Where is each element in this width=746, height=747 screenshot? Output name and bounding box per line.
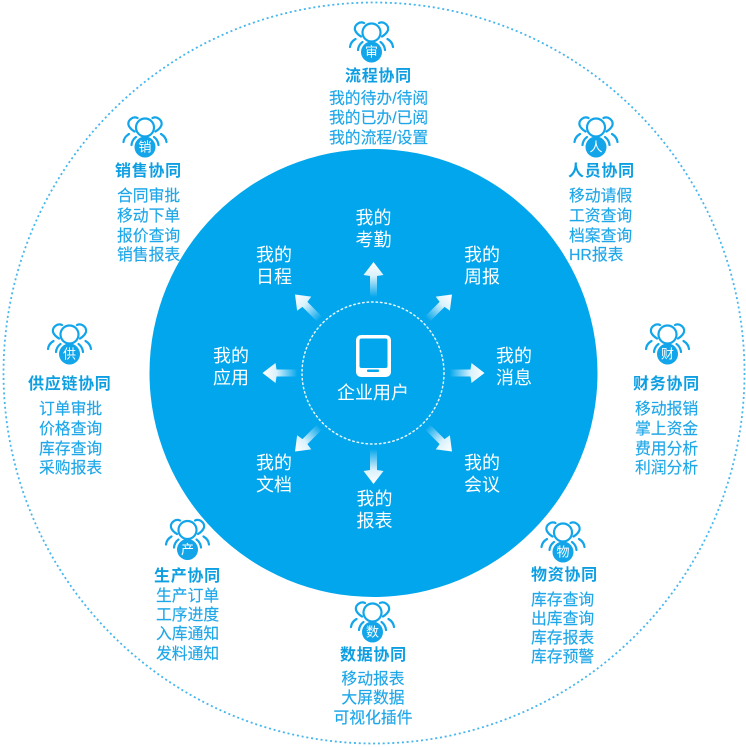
panel: workflow collaboration	[329, 22, 428, 147]
list: 库存查询	[531, 591, 594, 609]
icon: sales: 销	[138, 140, 152, 154]
panel: materials collaboration	[531, 522, 598, 666]
icon: sales	[124, 117, 166, 158]
panel: finance collaboration	[633, 324, 700, 477]
center label: documents: 文档	[256, 475, 292, 495]
arrow: right	[450, 363, 484, 383]
list: 我的待办/待阅	[329, 90, 428, 108]
list: 采购报表	[39, 459, 102, 477]
list: 我的流程/设置	[329, 129, 428, 147]
panel: production collaboration	[154, 520, 221, 663]
icon: finance	[646, 324, 689, 364]
heading: 流程协同	[345, 66, 412, 85]
heading: 财务协同	[633, 374, 700, 393]
list: 移动下单	[117, 207, 180, 225]
panel: sales collaboration	[115, 117, 182, 264]
icon: HR	[574, 117, 618, 158]
list: HR报表	[569, 246, 624, 264]
list: 入库通知	[156, 625, 219, 643]
arrow: down right	[420, 420, 459, 459]
arrow: up left	[288, 287, 327, 326]
center label: schedule: 我的	[256, 245, 292, 265]
panel: data collaboration	[334, 602, 413, 727]
center label: weekly report: 我的	[464, 245, 500, 265]
list: 报价查询	[117, 227, 180, 245]
list: 合同审批	[117, 187, 180, 205]
list: 移动报表	[341, 670, 405, 688]
center label: messages: 我的	[496, 346, 532, 366]
icon: tablet	[356, 335, 391, 377]
list: 订单审批	[39, 400, 102, 418]
list: 可视化插件	[334, 709, 413, 727]
icon: production: 产	[181, 542, 194, 557]
center label: reports: 我的	[356, 489, 392, 509]
panel: HR collaboration	[568, 117, 635, 264]
list: 掌上资金	[635, 420, 698, 438]
center label: meetings: 会议	[464, 475, 500, 495]
icon: materials	[542, 522, 584, 562]
center label: applications: 应用	[213, 368, 249, 388]
arrow: left	[262, 363, 298, 383]
heading: 销售协同	[115, 161, 182, 180]
icon: HR: 人	[589, 140, 603, 154]
icon: data: 数	[366, 624, 379, 640]
list: 移动请假	[569, 187, 632, 205]
center label: meetings: 我的	[464, 453, 500, 473]
icon: supply chain	[48, 324, 91, 364]
list: 价格查询	[39, 420, 102, 438]
center label: weekly report: 周报	[464, 267, 500, 287]
list: 库存预警	[531, 648, 594, 666]
icon: materials: 物	[556, 544, 570, 560]
list: 生产订单	[156, 587, 219, 605]
list: 发料通知	[156, 645, 219, 663]
panel: supply chain collaboration	[28, 324, 112, 477]
list: 出库查询	[531, 610, 594, 628]
arrow: up right	[420, 287, 459, 326]
list: 我的已办/已阅	[329, 109, 428, 127]
center label: attendance: 我的	[356, 208, 392, 228]
list: 利润分析	[635, 459, 698, 477]
list: 库存查询	[39, 440, 102, 458]
center label: applications: 我的	[213, 346, 249, 366]
center label: reports: 报表	[356, 511, 392, 531]
heading: 数据协同	[340, 646, 407, 664]
heading: 物资协同	[531, 566, 598, 584]
list: 费用分析	[635, 440, 698, 458]
center label: attendance: 考勤	[356, 230, 392, 250]
heading: 供应链协同	[28, 374, 112, 393]
center label: messages: 消息	[496, 368, 532, 388]
heading: 人员协同	[568, 162, 635, 180]
list: 销售报表	[117, 246, 180, 264]
icon: finance: 财	[661, 346, 674, 362]
label: enterprise user: 企业用户	[337, 383, 409, 403]
list: 移动报销	[635, 400, 698, 418]
list: 档案查询	[569, 227, 632, 245]
arrow: down	[364, 449, 384, 484]
central blue disc	[150, 149, 598, 597]
icon: workflow: 审	[365, 44, 378, 60]
icon: production	[166, 520, 209, 560]
center label: documents: 我的	[256, 453, 292, 473]
list: 大屏数据	[341, 689, 405, 707]
list: 工序进度	[156, 606, 219, 624]
inner dashed ring	[302, 302, 444, 444]
arrow: up	[364, 262, 384, 297]
icon: supply chain: 供	[63, 346, 76, 362]
list: 工资查询	[569, 207, 632, 225]
list: 库存报表	[531, 629, 594, 647]
heading: 生产协同	[154, 567, 221, 585]
arrow: down left	[288, 420, 327, 459]
center label: schedule: 日程	[256, 267, 292, 287]
